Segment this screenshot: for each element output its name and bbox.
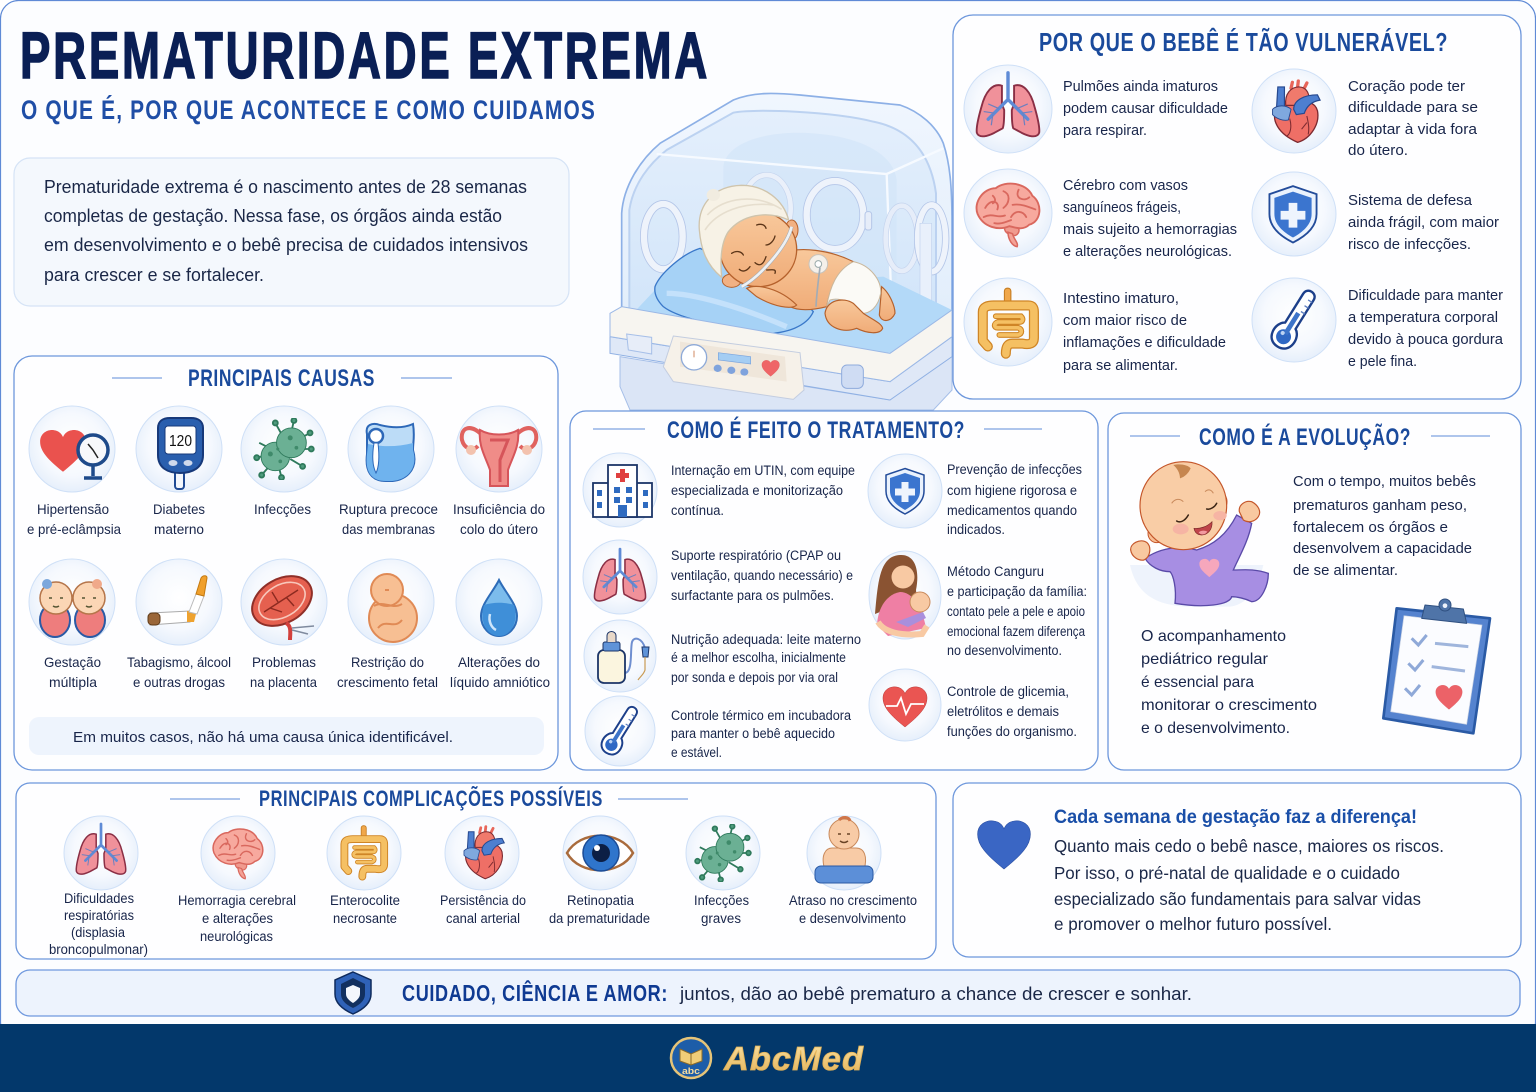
logo [671,1038,711,1078]
item: temperature: e pele fina. [1348,353,1417,370]
item: thermal control: e estável. [671,745,722,760]
icon: blue heart [978,821,1030,869]
cause: infections [241,406,327,517]
icon: shield [335,972,371,1014]
item: nutrition: é a melhor escolha, inicialmente [671,650,846,665]
item: infection prevention: indicados. [947,522,1005,537]
text: follow-up: monitorar o crescimento [1141,697,1317,714]
item: nutrition [584,620,861,692]
cause: multiple pregnancy: Gestação [44,654,101,670]
text: growth: fortalecem os órgãos e [1293,519,1448,536]
definition text: para crescer e se fortalecer. [44,264,264,285]
cause: tobacco: e outras drogas [133,674,225,690]
item: glycemia control: funções do organismo. [947,724,1077,739]
item: thermal control [585,696,851,766]
complication: severe infections: Infecções [694,893,749,908]
item: glycemia control: eletrólitos e demais [947,704,1059,719]
cause: hypertension [27,406,121,537]
message text [1054,807,1444,934]
item: nutrition: Nutrição adequada: leite materno [671,632,861,647]
banner text: juntos, dão ao bebê prematuro a chance de crescer e sonhar. [679,984,1192,1004]
item: intestine: inflamações e dificuldade [1063,334,1226,351]
complication: cerebral: neurológicas [200,929,273,944]
item: kangaroo method: e participação da família: [947,584,1087,599]
definition text: completas de gestação. Nessa fase, os órgãos ainda estão [44,205,502,226]
cause: multiple pregnancy [29,559,115,690]
item: temperature: a temperatura corporal [1348,309,1498,326]
heading: PRINCIPAIS COMPLICAÇÕES POSSÍVEIS [259,786,603,811]
complication: respiratory [49,816,148,957]
title: PREMATURIDADE EXTREMA [20,18,710,92]
item: infection prevention: medicamentos quando [947,503,1077,518]
item: temperature: Dificuldade para manter [1348,287,1503,304]
definition text: Prematuridade extrema é o nascimento antes de 28 semanas [44,176,527,197]
item: breathing support: Suporte respiratório (CPAP ou [671,548,841,563]
message text: Quanto mais cedo o bebê nasce, maiores os riscos. [1054,836,1444,856]
item: defense: ainda frágil, com maior [1348,214,1499,231]
complication: retinopathy [549,816,650,926]
cause: hypertension: e pré-eclâmpsia [27,521,121,537]
cause: diabetes: Diabetes [153,501,205,517]
item: brain: mais sujeito a hemorragias [1063,221,1237,238]
cause: amniotic fluid: Alterações do [458,654,540,670]
note: Em muitos casos, não há uma causa única identificável. [73,729,453,746]
base [620,347,952,410]
illustration: baby [1130,462,1268,607]
item: nutrition: por sonda e depois por via oral [671,670,838,685]
item: breathing support [583,540,853,614]
complication: respiratory: respiratórias [64,908,134,923]
banner: closing message [16,970,1520,1016]
item: breathing support: surfactante para os pulmões. [671,588,834,603]
complication: enterocolitis: Enterocolite [330,893,400,908]
panel: treatment [570,411,1098,770]
cause: tobacco [127,559,231,690]
cause: placenta [241,559,327,690]
item: heart: Coração pode ter [1348,78,1465,95]
item: kangaroo method: Método Canguru [947,564,1044,579]
baby head [785,220,798,240]
banner text: CUIDADO, CIÊNCIA E AMOR: [402,979,668,1006]
complication: delayed growth [789,816,917,926]
cause: fetal growth restriction: crescimento fetal [337,674,438,690]
cause: diabetes: 120 [169,433,192,450]
text: growth: prematuros ganham peso, [1293,497,1467,514]
complication: ductus arteriosus [440,816,526,926]
message text: e promover o melhor futuro possível. [1054,914,1332,934]
cause: placenta: Problemas [252,654,316,670]
panel: complications [16,783,936,959]
item: lungs: Pulmões ainda imaturos [1063,78,1218,95]
complication: ductus arteriosus: Persistência do [440,893,526,908]
heading: COMO É FEITO O TRATAMENTO? [667,416,965,444]
item: NICU [583,453,855,527]
item: NICU: Internação em UTIN, com equipe [671,463,855,478]
item: intestine [964,278,1226,374]
cause: membrane rupture: das membranas [342,521,435,537]
item: temperature [1252,278,1504,370]
item: kangaroo method [869,551,1087,658]
cause: membrane rupture [339,406,438,537]
text: follow-up: O acompanhamento [1141,628,1286,645]
illustration: baby in incubator [610,93,952,410]
cause: hypertension: Hipertensão [37,501,109,517]
cause: cervical insufficiency [453,406,545,537]
item: brain: Cérebro com vasos [1063,177,1188,194]
cause: infections: Infecções [254,501,311,517]
complication: enterocolitis [327,816,401,926]
complication: enterocolitis: necrosante [333,911,397,926]
complication: delayed growth: e desenvolvimento [799,911,906,926]
item: intestine: Intestino imaturo, [1063,290,1179,307]
item: infection prevention: com higiene rigorosa e [947,483,1077,498]
complication: respiratory: Dificuldades [64,891,134,906]
cause: diabetes: materno [154,521,204,537]
cause: membrane rupture: Ruptura precoce [339,501,438,517]
message text: Por isso, o pré-natal de qualidade e o cuidado [1054,863,1400,883]
complication: retinopathy: da prematuridade [549,911,650,926]
complication: delayed growth: Atraso no crescimento [789,893,917,908]
text: follow-up: e o desenvolvimento. [1141,720,1290,737]
cause: cervical insufficiency: Insuficiência do [453,501,545,517]
text: follow-up [1141,628,1317,737]
pillow [655,248,813,334]
panel: main causes [14,356,558,770]
item: breathing support: ventilação, quando necessário) e [671,568,853,583]
cause: fetal growth restriction: Restrição do [351,654,424,670]
item: infection prevention: Prevenção de infecções [947,462,1082,477]
item: kangaroo method: no desenvolvimento. [947,643,1062,658]
cause: diabetes [136,406,222,537]
item: heart: do útero. [1348,142,1408,159]
message text: especializado são fundamentais para salvar vidas [1054,889,1421,909]
item: lungs: para respirar. [1063,122,1147,139]
text: follow-up: é essencial para [1141,674,1254,691]
item: heart: adaptar à vida fora [1348,121,1478,138]
complication: cerebral: e alterações [202,911,273,926]
item: NICU: contínua. [671,503,724,518]
complication: severe infections [686,816,760,926]
brand name: AbcMed [723,1040,864,1077]
item: kangaroo method: emocional fazem diferença [947,624,1085,639]
message text: Cada semana de gestação faz a diferença! [1054,807,1417,828]
item: thermal control: para manter o bebê aquecido [671,726,835,741]
item: temperature: devido à pouca gordura [1348,331,1504,348]
item: defense: Sistema de defesa [1348,192,1473,209]
cause: cervical insufficiency: colo do útero [460,521,538,537]
item: heart: dificuldade para se [1348,99,1478,116]
text: growth [1293,473,1476,579]
item: glycemia control [869,669,1077,741]
complication: cerebral [178,816,296,944]
item: kangaroo method: contato pele a pele e apoio [947,604,1085,619]
icon: clipboard [1383,599,1490,733]
panel: evolution [1108,413,1521,770]
baby body [879,287,895,320]
panel: message [953,783,1521,957]
footer [0,1024,1536,1092]
item: heart [1252,69,1478,159]
heading: PRINCIPAIS CAUSAS [188,365,375,392]
text: growth: de se alimentar. [1293,562,1398,579]
item: glycemia control: Controle de glicemia, [947,684,1069,699]
item: infection prevention [868,454,1082,537]
note [29,717,544,755]
cause: tobacco: Tabagismo, álcool [127,654,231,670]
item: defense: risco de infecções. [1348,236,1471,253]
complication: cerebral: Hemorragia cerebral [178,893,296,908]
subtitle: O QUE É, POR QUE ACONTECE E COMO CUIDAMOS [21,94,596,125]
complication: ductus arteriosus: canal arterial [446,911,520,926]
item: brain: sanguíneos frágeis, [1063,199,1181,216]
logo: abc [682,1066,700,1076]
cause: fetal growth restriction [337,559,438,690]
cause: multiple pregnancy: múltipla [49,674,97,690]
panel: definition [14,158,569,306]
banner text [402,979,1192,1006]
item: intestine: para se alimentar. [1063,357,1178,374]
text: follow-up: pediátrico regular [1141,651,1269,668]
complication: respiratory: (displasia [71,925,125,940]
text: growth: Com o tempo, muitos bebês [1293,473,1476,490]
text: growth: desenvolvem a capacidade [1293,540,1472,557]
cause: placenta: na placenta [250,674,317,690]
complication: respiratory: broncopulmonar) [49,942,148,957]
item: brain: e alterações neurológicas. [1063,243,1232,260]
item: lungs [964,65,1228,153]
cause: amniotic fluid [450,559,550,690]
item: intestine: com maior risco de [1063,312,1187,329]
hat [699,185,789,277]
heading: COMO É A EVOLUÇÃO? [1199,423,1411,451]
definition text: em desenvolvimento e o bebê precisa de cuidados intensivos [44,234,528,255]
cause: amniotic fluid: líquido amniótico [450,674,550,690]
item: NICU: especializada e monitorização [671,483,843,498]
item: brain [964,169,1237,260]
complication: retinopathy: Retinopatia [567,893,634,908]
item: defense [1252,172,1499,256]
definition text [44,176,528,285]
item: thermal control: Controle térmico em incubadora [671,708,851,723]
item: lungs: podem causar dificuldade [1063,100,1228,117]
complication: severe infections: graves [701,911,741,926]
panel: why vulnerable [953,15,1521,399]
